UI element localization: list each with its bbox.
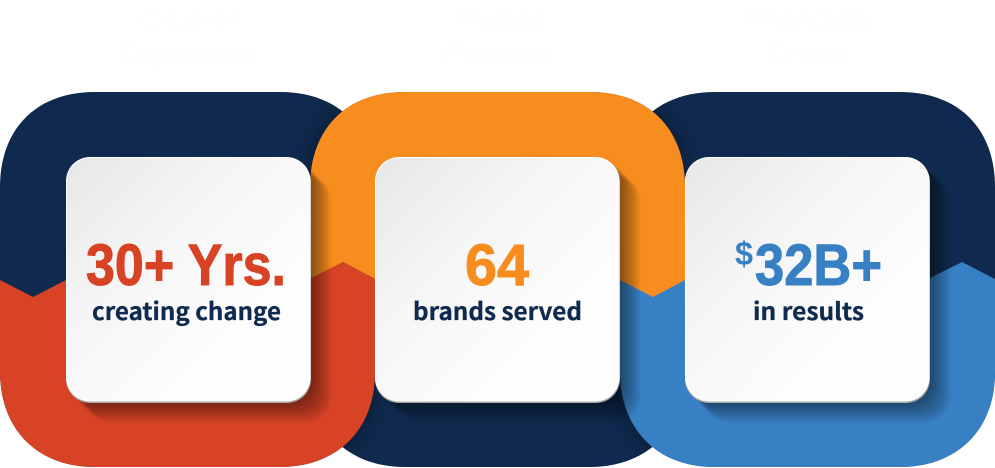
stat: $32B+: $ — [735, 235, 753, 272]
middle band: orange top — [310, 92, 685, 297]
faint heading: Financially Driven: Driven — [769, 38, 849, 69]
left band: navy top — [0, 92, 375, 467]
faint heading: C-Level Experience: Experience — [118, 38, 258, 69]
stat: 30+ Yrs.: 30+ Yrs. — [86, 233, 286, 298]
panel: 64 brands card — [375, 157, 640, 422]
middle band: navy bottom — [310, 92, 685, 467]
faint heading: C-Level Experience: C-Level — [140, 3, 236, 34]
stat: 64: 64 — [465, 233, 529, 298]
left band: red bottom — [0, 262, 375, 467]
panel: $32B+ results card — [685, 157, 950, 422]
faint heading: Trusted Partners: Trusted — [450, 3, 544, 34]
faint heading: Financially Driven — [743, 3, 875, 69]
stat: $32B+: 32B+ — [755, 233, 882, 298]
faint heading: Trusted Partners — [444, 3, 550, 69]
panel: 30+ years card — [66, 157, 331, 422]
right band: navy top — [620, 92, 995, 467]
label: brands served: brands served — [413, 292, 582, 327]
label: in results: in results — [753, 292, 864, 327]
right band: blue bottom — [620, 262, 995, 467]
faint heading: C-Level Experience — [118, 3, 258, 69]
faint heading: Trusted Partners: Partners — [444, 38, 550, 69]
faint heading: Financially Driven: Financially — [743, 3, 875, 34]
label: creating change: creating change — [92, 292, 281, 327]
